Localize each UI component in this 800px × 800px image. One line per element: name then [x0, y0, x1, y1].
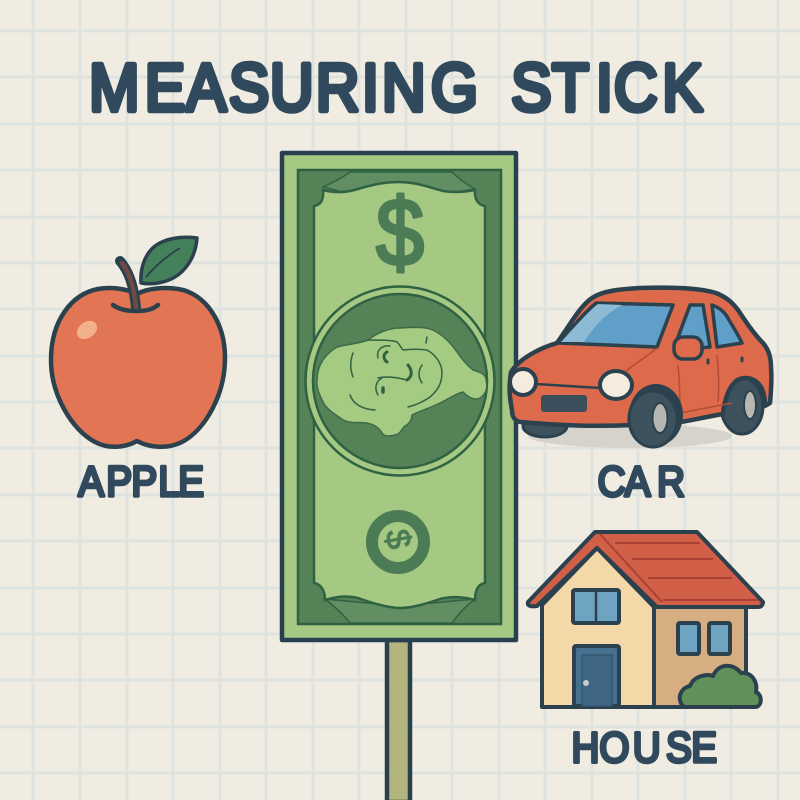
house roof: [528, 532, 763, 607]
label: apple: APPLE: [78, 457, 204, 505]
small dollar seal: $: [377, 526, 418, 552]
house bush: [680, 666, 761, 707]
dollar bill sign: [282, 153, 516, 640]
apple highlight: [73, 317, 101, 343]
bottom ornament: [325, 599, 475, 623]
car front tire: [629, 384, 683, 447]
car shadow: [528, 424, 732, 448]
apple dimple: [113, 305, 158, 311]
car mirror: [674, 337, 702, 359]
car grille: [541, 395, 587, 412]
house left wall: [542, 548, 654, 707]
apple body: [51, 288, 225, 447]
house small windows: [678, 623, 730, 654]
bill inner border: [298, 170, 501, 624]
house door: [574, 646, 619, 706]
title: STICK: [511, 50, 703, 125]
apple stem: [120, 261, 136, 308]
portrait features: [350, 337, 442, 410]
icon: car: [510, 288, 771, 448]
car body: [510, 288, 771, 426]
car headlights: [510, 369, 536, 395]
small dollar seal: [372, 516, 424, 568]
icon: house: [528, 532, 763, 707]
car side windows: [677, 305, 710, 350]
car windshield: [559, 303, 673, 347]
car far front tire: [523, 415, 567, 437]
label: house: HOUSE: [572, 723, 717, 771]
bill background: [282, 153, 516, 640]
apple leaf: [141, 237, 197, 284]
portrait medallion: [306, 286, 494, 476]
dollar symbol: $: [376, 179, 424, 286]
house right wall: [654, 607, 746, 707]
label: car: CAR: [598, 457, 685, 505]
signpost: measuring stick pole: [387, 640, 410, 800]
title: MEASURING: [89, 50, 478, 125]
car door handles: [708, 358, 742, 363]
top ornament: [323, 172, 475, 194]
portrait head: [317, 327, 487, 436]
car rear tire: [721, 378, 763, 434]
icon: apple: [51, 237, 225, 447]
bill light centre panel: [314, 182, 485, 608]
car body lines: [626, 348, 732, 418]
house large window: [573, 590, 619, 623]
